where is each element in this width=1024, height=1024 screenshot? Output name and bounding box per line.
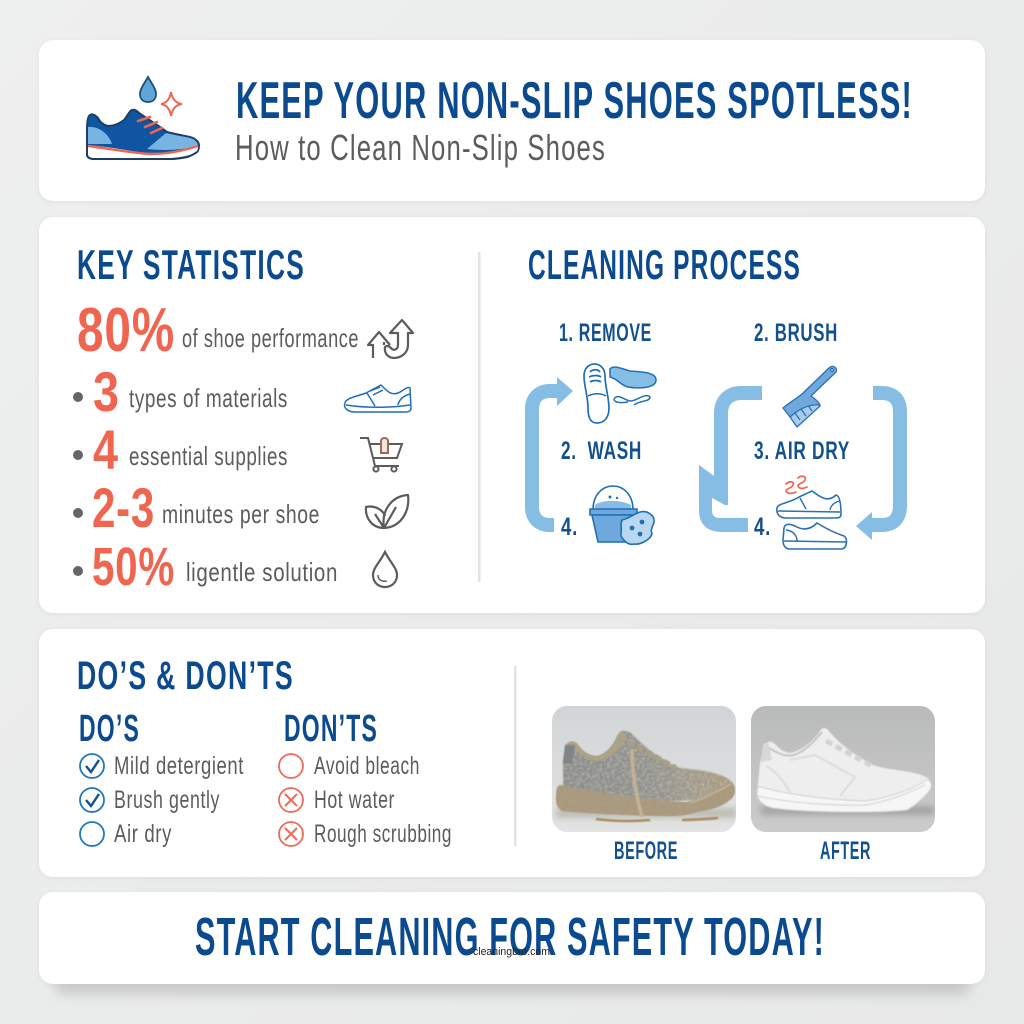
- panel: call to action: [39, 892, 985, 984]
- watermark: cleaningbro.com: [473, 946, 550, 958]
- label: after: AFTER: [820, 837, 871, 865]
- icon: drying shoes: [777, 476, 846, 549]
- step labels: 2. BRUSH: [754, 319, 838, 347]
- image: clean shoe after: [751, 706, 935, 832]
- list: do's: Air dry: [114, 820, 172, 848]
- stat: 4 supplies: 4: [93, 418, 118, 481]
- list: don'ts: Hot water: [314, 786, 395, 814]
- list: do's: Mild detergient: [114, 752, 244, 780]
- panel: statistics and process: [39, 217, 985, 613]
- arrow: right loop: [856, 393, 900, 540]
- stat: 50% solution: [73, 537, 338, 597]
- step labels: 4.: [561, 513, 578, 541]
- panel: do's and don'ts: [39, 629, 985, 877]
- list: don'ts: Avoid bleach: [314, 752, 420, 780]
- step labels: 2. WASH: [561, 437, 642, 465]
- icon: droplet: [373, 552, 397, 587]
- heading: do's and don'ts: DO’S & DON’TS: [77, 654, 294, 698]
- list: don'ts: DON’TS: [284, 708, 378, 750]
- stat: 4 supplies: essential supplies: [129, 441, 288, 471]
- step labels: 3. AIR DRY: [754, 437, 850, 465]
- step labels: 1. REMOVE: [559, 319, 652, 347]
- step labels: 4.: [754, 513, 771, 541]
- icon: brush: [783, 366, 836, 427]
- icon: bucket and sponge: [590, 486, 654, 544]
- stat: 2-3 minutes: [73, 476, 320, 539]
- list: do's: Brush gently: [114, 786, 220, 814]
- subtitle: How to Clean Non-Slip Shoes: [235, 127, 606, 168]
- stat: 3 materials: types of materials: [129, 383, 288, 413]
- stat: 3 materials: [73, 360, 288, 423]
- stat: 80%: 80%: [77, 296, 175, 365]
- stat: 4 supplies: [73, 418, 288, 481]
- icon: shoe with water drop and sparkle: [87, 77, 199, 159]
- stat: 80%: of shoe performance: [182, 323, 359, 353]
- list: do's: [79, 708, 244, 848]
- heading: key statistics: KEY STATISTICS: [77, 241, 305, 288]
- icon: cart: [360, 438, 402, 472]
- list: don'ts: [279, 708, 452, 848]
- stat: 2-3 minutes: minutes per shoe: [162, 499, 320, 529]
- step labels: [559, 319, 850, 541]
- stat: 3 materials: 3: [93, 360, 119, 423]
- label: before: BEFORE: [614, 837, 678, 865]
- icon: arrows up: [368, 320, 413, 358]
- arrow: left loop: [532, 377, 573, 525]
- icon: shoe outline: [345, 385, 411, 412]
- arrow: middle loop: [699, 393, 762, 532]
- icon: shoe parts: [584, 364, 656, 423]
- stat: 2-3 minutes: 2-3: [92, 476, 155, 539]
- panel: header: [39, 40, 985, 201]
- stat: 50% solution: 50%: [92, 537, 175, 597]
- icon: leaves: [366, 495, 408, 528]
- list: don'ts: Rough scrubbing: [314, 820, 452, 848]
- stat: 50% solution: ligentle solution: [186, 557, 338, 587]
- heading: cleaning process: CLEANING PROCESS: [528, 241, 801, 288]
- image: dirty shoe before: [552, 706, 736, 832]
- list: do's: DO’S: [79, 708, 140, 750]
- stat: 80%: [77, 296, 359, 365]
